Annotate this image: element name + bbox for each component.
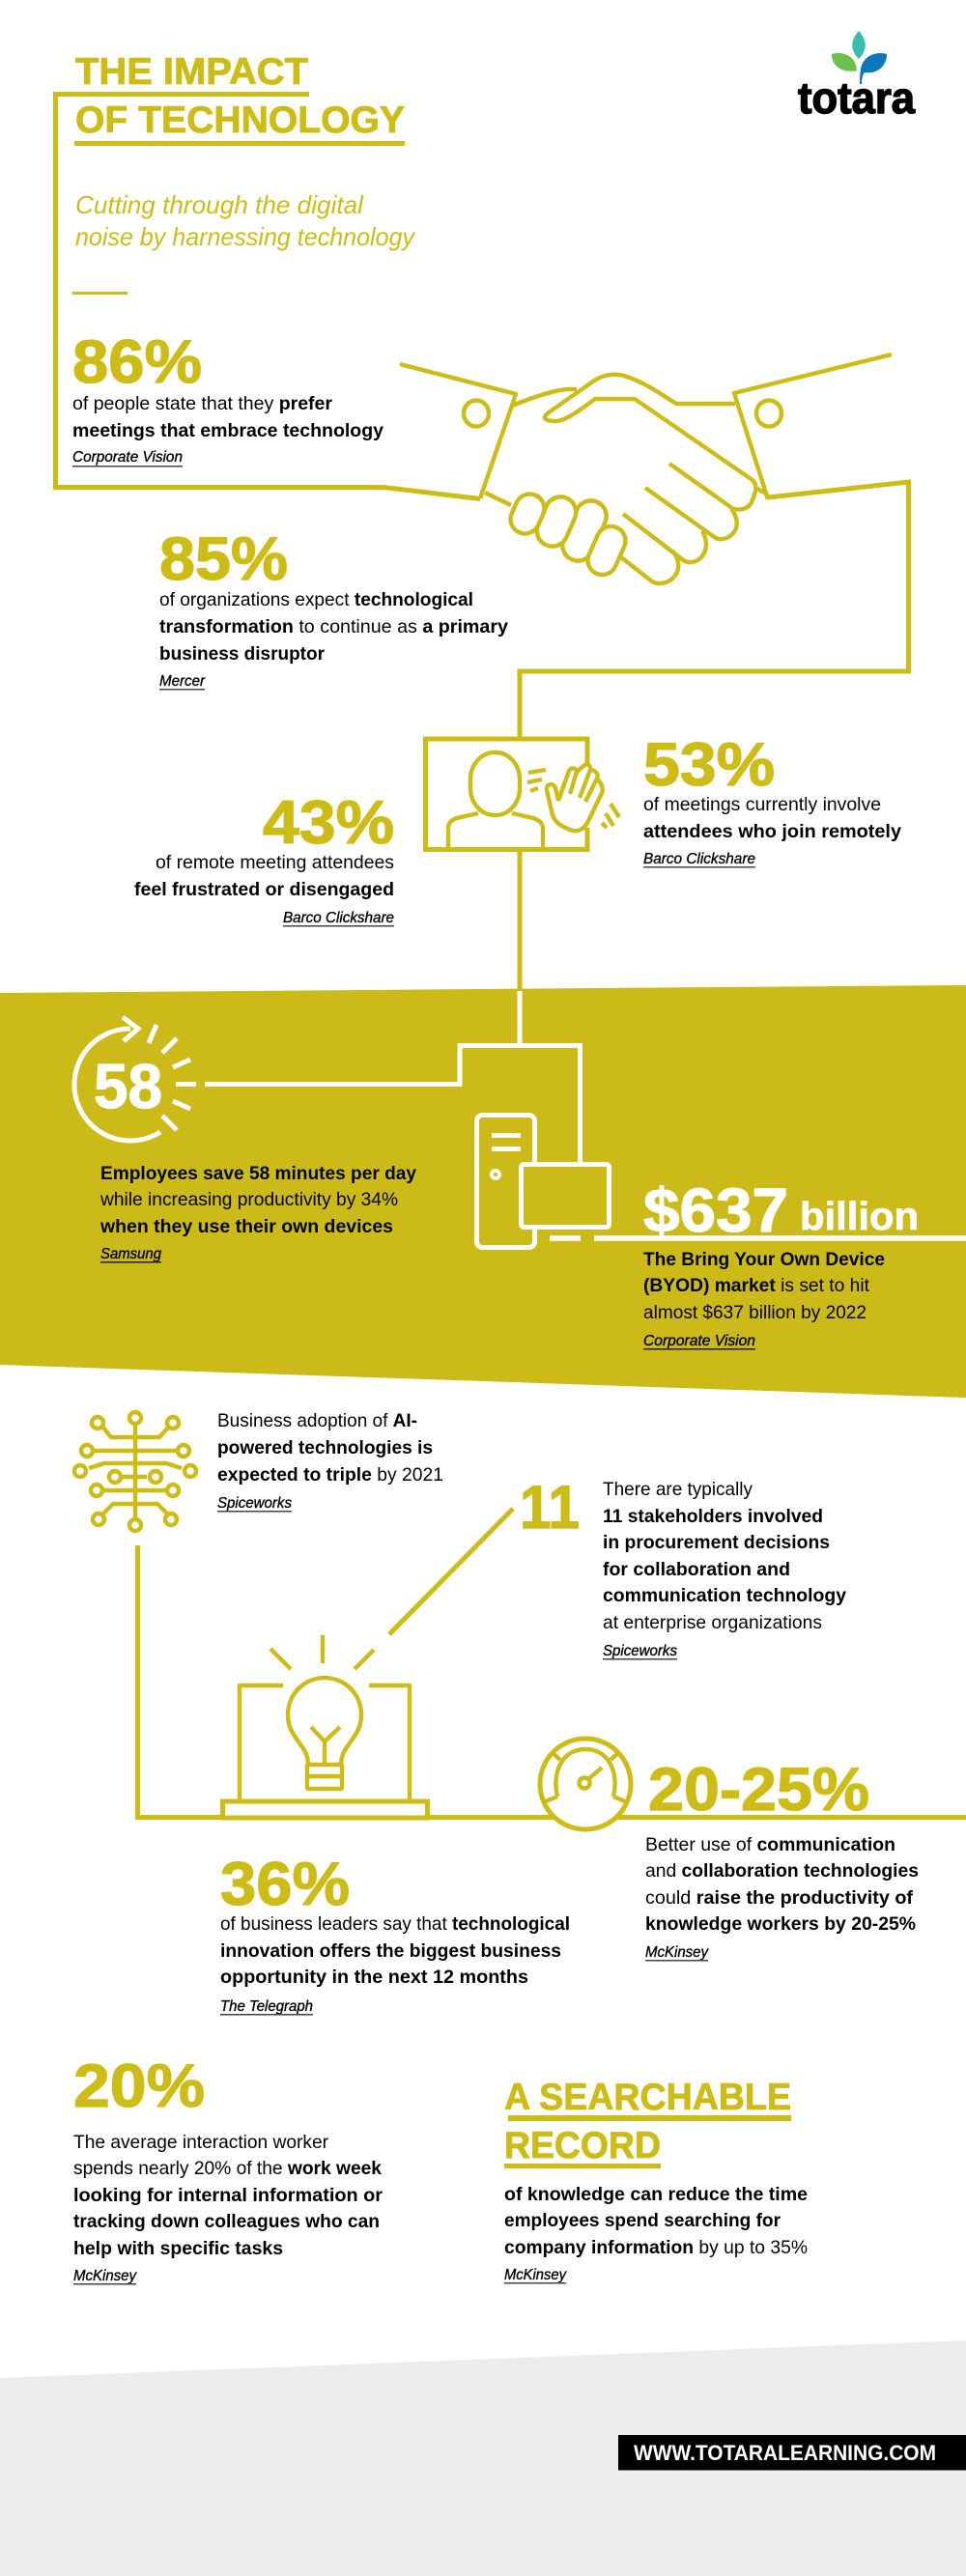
subtitle: Cutting through the digital — [75, 190, 364, 219]
stat: 53%: of meetings currently involve — [643, 794, 881, 815]
icon: video call — [425, 739, 619, 850]
stat: 58 minutes text — [99, 1163, 416, 1263]
subtitle — [75, 190, 416, 251]
stat: 36%: 36% — [220, 1851, 350, 1918]
stat: $637 billion: (BYOD) market is set to hit — [643, 1275, 870, 1296]
stat: 20-25%: McKinsey — [645, 1944, 709, 1961]
logo: totara — [798, 31, 916, 123]
stat: $637 billion: almost $637 billion by 2022 — [643, 1302, 867, 1323]
stat: 43%: of remote meeting attendees — [156, 852, 394, 873]
footer URL badge: WWW.TOTARALEARNING.COM — [634, 2441, 936, 2465]
stat: 53%: attendees who join remotely — [643, 821, 901, 842]
icon: 58 minutes clock — [74, 1017, 196, 1141]
stat: 20% — [73, 2052, 383, 2285]
stat: 86%: 86% — [72, 328, 202, 396]
stat: 11 stakeholders: 11 stakeholders involved — [603, 1506, 823, 1527]
stat: 11 stakeholders — [520, 1474, 846, 1659]
stat: 20-25% — [645, 1756, 919, 1961]
stat: 43%: feel frustrated or disengaged — [134, 879, 394, 900]
stat: 20-25%: and collaboration technologies — [645, 1860, 919, 1882]
title — [74, 51, 405, 146]
stat: 53% — [643, 731, 901, 867]
stat: 86%: of people state that they prefer — [72, 393, 332, 414]
stat: 86%: Corporate Vision — [72, 449, 183, 466]
stat: 43%: Barco Clickshare — [283, 910, 394, 926]
stat: $637 billion: The Bring Your Own Device — [643, 1249, 885, 1270]
stat: 36% — [220, 1851, 570, 2015]
stat: 86%: meetings that embrace technology — [72, 420, 384, 441]
stat: 11 stakeholders: 11 — [520, 1474, 580, 1542]
stat: 43% — [134, 789, 394, 927]
stat: AI adoption text — [217, 1410, 443, 1513]
stat: 20%: The average interaction worker — [73, 2132, 328, 2153]
stat: 58 minutes text: when they use their own devices — [99, 1216, 393, 1237]
stat: AI adoption text: Business adoption of AI- — [217, 1410, 417, 1431]
subtitle: noise by harnessing technology — [75, 222, 416, 251]
stat: 11 stakeholders: in procurement decisions — [603, 1532, 830, 1553]
stat: a searchable record — [504, 2077, 808, 2283]
stat: 58 minutes text: Employees save 58 minutes per day — [100, 1163, 416, 1184]
stat: AI adoption text: expected to triple by 2021 — [217, 1464, 443, 1486]
stat: 85%: 85% — [159, 525, 288, 593]
stat: 43%: 43% — [263, 789, 394, 857]
stat: 85%: business disruptor — [159, 643, 325, 665]
stat: 20%: looking for internal information or — [73, 2185, 383, 2206]
stat: 11 stakeholders: There are typically — [603, 1479, 753, 1500]
stat: 85%: transformation to continue as a primary — [159, 616, 508, 637]
connector line from handshake to video icon — [520, 482, 908, 737]
stat: 11 stakeholders: at enterprise organizations — [603, 1612, 822, 1633]
stat: 20-25%: 20-25% — [648, 1756, 869, 1824]
stat: 20%: McKinsey — [73, 2268, 137, 2284]
stat: 36%: of business leaders say that technological — [220, 1913, 570, 1935]
stat: 20-25%: knowledge workers by 20-25% — [645, 1913, 916, 1935]
stat: a searchable record: RECORD — [504, 2125, 661, 2166]
stat: 53%: Barco Clickshare — [643, 851, 755, 867]
stat: AI adoption text: Spiceworks — [217, 1495, 292, 1512]
icon: AI circuit — [74, 1412, 196, 1531]
stat: 36%: The Telegraph — [220, 1998, 313, 2015]
stat: 58 minutes text: Samsung — [100, 1246, 161, 1262]
stat: a searchable record: McKinsey — [504, 2267, 567, 2283]
footer URL badge — [618, 2435, 966, 2471]
connector lines inside band — [205, 991, 580, 1162]
stat: 11 stakeholders: for collaboration and — [603, 1559, 790, 1580]
stat: 20%: tracking down colleagues who can — [73, 2211, 380, 2232]
stat: a searchable record: A SEARCHABLE — [504, 2077, 791, 2118]
stat: a searchable record: company information by up to 35% — [504, 2237, 808, 2258]
icon: speedometer gauge — [540, 1739, 631, 1829]
logo: totara: totara — [798, 73, 916, 123]
stat: $637 billion: $637 — [643, 1175, 788, 1245]
stat: 20-25%: could raise the productivity of — [645, 1887, 914, 1909]
stat: $637 billion: billion — [800, 1194, 919, 1238]
stat: 85%: Mercer — [159, 673, 206, 690]
stat: 20%: spends nearly 20% of the work week — [73, 2158, 382, 2179]
stat: 85%: of organizations expect technological — [159, 589, 473, 610]
stat: 36%: opportunity in the next 12 months — [220, 1967, 528, 1988]
stat: 86% — [72, 328, 384, 467]
title frame connector line — [56, 95, 480, 498]
stat: 20%: help with specific tasks — [73, 2238, 283, 2259]
line under BYOD figure — [550, 1235, 966, 1241]
panel: grey footer band — [0, 2340, 966, 2576]
stat: 11 stakeholders: Spiceworks — [603, 1643, 677, 1659]
stat: a searchable record: of knowledge can reduce the time — [504, 2184, 808, 2205]
icon: handshake — [400, 354, 892, 583]
stat: 20-25%: Better use of communication — [645, 1834, 895, 1855]
stat: AI adoption text: powered technologies is — [217, 1437, 433, 1458]
stat: 53%: 53% — [643, 731, 775, 799]
panel: yellow BYOD band — [0, 985, 966, 1398]
icon: light bulb on laptop — [222, 1635, 427, 1818]
title: THE IMPACT — [75, 51, 308, 93]
stat: $637 billion: Corporate Vision — [643, 1333, 755, 1349]
icon: computer tower and screen — [477, 1115, 609, 1248]
stat: $637 billion — [643, 1175, 919, 1350]
stat: 85% — [159, 525, 508, 690]
stat: 11 stakeholders: communication technology — [603, 1585, 846, 1606]
connector line from video icon to band — [518, 852, 522, 989]
connector line from circuit to bottom row — [137, 1545, 966, 1818]
stat: 58 minutes text: while increasing productivity by 34% — [99, 1189, 398, 1210]
title: OF TECHNOLOGY — [75, 99, 405, 141]
stat: 36%: innovation offers the biggest business — [220, 1940, 561, 1962]
icon: 58 minutes clock: 58 — [94, 1051, 162, 1121]
diagonal connector from bulb to 11 — [389, 1509, 513, 1634]
stat: 20%: 20% — [73, 2052, 205, 2120]
stat: a searchable record: employees spend searching for — [504, 2210, 781, 2231]
